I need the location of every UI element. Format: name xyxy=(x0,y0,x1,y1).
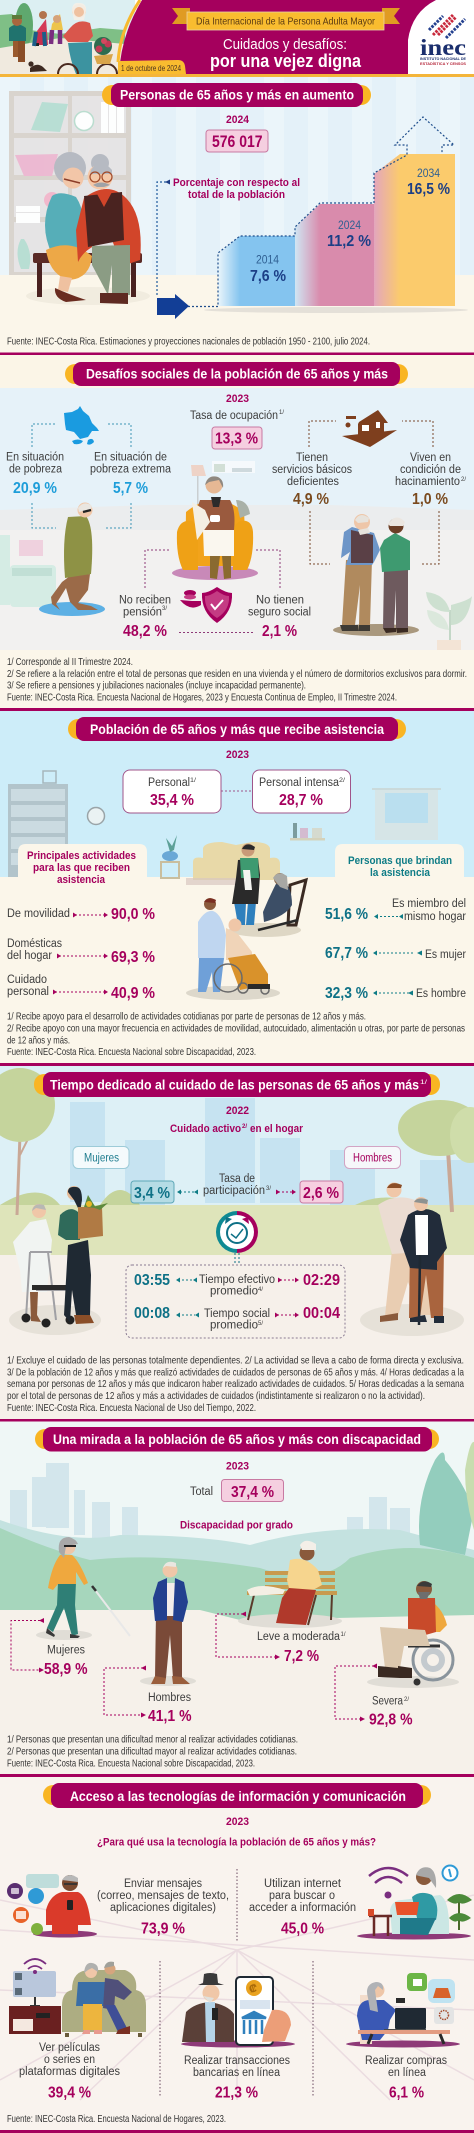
social security label: seguro social xyxy=(248,606,311,618)
crimson title band xyxy=(119,0,436,74)
year: 2023 xyxy=(226,393,249,405)
enviar mensajes: 73,9 % xyxy=(141,1920,185,1938)
tiempo social: 5/ xyxy=(258,1321,263,1327)
label: mujeres xyxy=(73,1146,129,1168)
panel: discapacidad xyxy=(0,1422,474,1774)
illustration: walking man xyxy=(39,502,105,616)
total callout: 37,4 % xyxy=(231,1484,274,1501)
ribbon xyxy=(172,8,400,30)
total callout: Total xyxy=(190,1486,213,1498)
realizar transacciones: Realizar transacciones xyxy=(184,2055,290,2067)
utilizan internet: 45,0 % xyxy=(281,1920,324,1938)
label mujeres xyxy=(44,1644,88,1678)
illustration: caregivers and older adults xyxy=(186,844,306,1000)
poverty label: 20,9 % xyxy=(13,480,57,497)
dividers xyxy=(160,1869,313,2096)
main title: Cuidados y desafíos: xyxy=(223,36,347,53)
tiempo efectivo: 02:29 xyxy=(303,1272,340,1289)
realizar transacciones xyxy=(184,2055,290,2102)
row: cuidado personal: personal xyxy=(7,986,49,998)
background hills xyxy=(0,1520,474,1610)
decorative title pill: Personas de 65 años y más en aumento xyxy=(120,88,354,102)
background city xyxy=(70,1098,474,1205)
row: cuidado personal: Cuidado xyxy=(7,974,47,986)
panel: main activities: asistencia xyxy=(57,874,106,886)
panel: main activities: para las que reciben xyxy=(33,862,130,874)
participation rate: Tasa de xyxy=(219,1173,255,1185)
illustration: man in wheelchair xyxy=(367,1581,459,1688)
pension label: 3/ xyxy=(162,606,167,612)
header illustration: park with older people xyxy=(0,0,135,84)
overcrowding label: 1,0 % xyxy=(412,491,448,508)
title pill: Desafíos sociales de la población de 65 años y más xyxy=(86,366,388,382)
label severa: Severa xyxy=(372,1696,404,1708)
row: movilidad: 90,0 % xyxy=(111,906,155,923)
footnotes: Fuente: INEC-Costa Rica. Encuesta Nacional de Uso del Tiempo, 2022. xyxy=(7,1402,256,1414)
background sofa and lamp xyxy=(0,535,56,607)
basic services label: 4,9 % xyxy=(293,491,329,508)
ribbon: Día Internacional de la Persona Adulta Mayor xyxy=(196,16,375,28)
background wall shelf xyxy=(290,823,325,840)
label leve a moderada: Leve a moderada xyxy=(257,1631,341,1643)
enviar mensajes: Enviar mensajes xyxy=(124,1878,202,1890)
background window xyxy=(372,788,441,840)
illustration: banking: ₡ xyxy=(249,1983,257,1995)
background plant xyxy=(426,592,472,650)
icon: house xyxy=(342,410,397,447)
title pill: Una mirada a la población de 65 años y más con discapacidad xyxy=(53,1432,421,1447)
yellow arc xyxy=(118,0,140,62)
INEC logo: INSTITUTO NACIONAL DE xyxy=(420,57,467,61)
background trees xyxy=(419,1442,474,1555)
row: domésticas xyxy=(7,938,155,966)
subtitle: Discapacidad por grado xyxy=(180,1520,293,1532)
center lamp and shelf decoration xyxy=(191,461,255,504)
illustration: couple watching streaming xyxy=(9,1959,146,2037)
label: mujeres: Mujeres xyxy=(84,1152,119,1164)
subtitle xyxy=(170,1123,304,1135)
bar 2034: 2034 xyxy=(417,168,441,180)
poverty dotted arrows xyxy=(32,424,131,528)
footnotes: 1/ Corresponde al II Trimestre 2024. xyxy=(7,656,133,668)
background radial lines xyxy=(0,1895,474,2100)
utilizan internet: acceder a información xyxy=(249,1902,356,1914)
realizar compras: 6,1 % xyxy=(389,2084,424,2102)
panel: población que recibe asistencia xyxy=(0,711,474,1063)
footnotes: Fuente: INEC-Costa Rica. Encuesta Nacional sobre Discapacidad, 2023. xyxy=(7,1758,255,1770)
participation rate: 3/ xyxy=(266,1186,271,1192)
overcrowding label: hacinamiento xyxy=(395,476,460,488)
row: domésticas: del hogar xyxy=(7,950,52,962)
panel: main activities: Principales actividades xyxy=(27,850,136,862)
row: mujer xyxy=(325,945,466,962)
row: hombre: 32,3 % xyxy=(325,985,368,1002)
source: Fuente: INEC-Costa Rica. Encuesta Nacional de Hogares, 2023. xyxy=(7,2113,226,2125)
illustration: man standing xyxy=(140,1562,196,1686)
chart label: total de la población xyxy=(188,189,285,201)
row: mujer: 67,7 % xyxy=(325,945,368,962)
row: hombre xyxy=(325,985,466,1002)
title pill xyxy=(34,1072,440,1097)
row: miembro del hogar: mismo hogar xyxy=(404,911,466,923)
basic services label xyxy=(272,452,352,508)
bar 2034: 16,5 % xyxy=(407,181,450,198)
row: miembro del hogar xyxy=(325,898,466,923)
title pill xyxy=(43,1783,431,1808)
bookshelf illustration xyxy=(9,91,131,275)
utilizan internet: Utilizan internet xyxy=(264,1878,342,1890)
social security label: 2,1 % xyxy=(262,623,297,640)
label leve a moderada: 7,2 % xyxy=(284,1648,319,1665)
social security label xyxy=(248,594,311,640)
footnotes: 3/ Se refiere a pensiones y jubilaciones nacionales (incluye incapacidad permanente). xyxy=(7,680,306,692)
dotted arrows xyxy=(11,1614,374,1719)
extreme poverty label: pobreza extrema xyxy=(90,464,172,476)
callout: personal intensa: 28,7 % xyxy=(279,792,323,809)
illustration: online shopping xyxy=(346,1973,460,2048)
question: ¿Para qué usa la tecnología la población de 65 años y más? xyxy=(97,1836,376,1848)
basic services label: Tienen xyxy=(296,452,328,464)
row: movilidad xyxy=(7,906,155,923)
footnotes xyxy=(7,656,467,704)
chart label xyxy=(173,177,300,201)
enviar mensajes: (correo, mensajes de texto, xyxy=(97,1890,229,1902)
ver películas: Ver películas xyxy=(39,2042,100,2054)
ver películas: plataformas digitales xyxy=(19,2066,120,2078)
row: hombre: Es hombre xyxy=(416,988,466,1000)
occupation rate: 13,3 % xyxy=(215,430,258,448)
icon: poverty map xyxy=(64,406,99,445)
illustration: banking xyxy=(181,1973,295,2048)
participation rate: 3,4 % xyxy=(134,1185,170,1202)
label mujeres: Mujeres xyxy=(47,1644,85,1656)
row: domésticas: Domésticas xyxy=(7,938,62,950)
panel: caregivers: la asistencia xyxy=(370,867,431,879)
main title xyxy=(210,36,362,71)
decorative title pill xyxy=(102,83,371,107)
panel: caregivers xyxy=(335,844,464,880)
date tab xyxy=(118,60,186,74)
participation rate xyxy=(131,1173,343,1203)
row: miembro del hogar: 51,6 % xyxy=(325,906,368,923)
year: 2023 xyxy=(226,749,249,761)
footnotes: 1/ Personas que presentan una dificultad menor al realizar actividades cotidianas. xyxy=(7,1734,298,1746)
subtitle: en el hogar xyxy=(250,1123,304,1135)
row: mujer: Es mujer xyxy=(425,949,466,961)
title pill xyxy=(68,717,406,741)
bar 2014: 2014 xyxy=(256,254,280,266)
INEC logo: ESTADÍSTICA Y CENSOS xyxy=(420,61,467,66)
bar 2024: 11,2 % xyxy=(327,233,371,250)
year: 2023 xyxy=(226,1460,249,1472)
footnotes xyxy=(7,1010,465,1058)
title pill: Tiempo dedicado al cuidado de las personas de 65 años y más xyxy=(50,1078,419,1092)
year: 2023 xyxy=(226,1816,249,1828)
pension label: No reciben xyxy=(119,594,171,606)
label severa xyxy=(369,1696,412,1728)
illustration: woman on bench xyxy=(238,1541,342,1628)
ver películas: 39,4 % xyxy=(48,2084,91,2102)
callout: personal: 35,4 % xyxy=(150,792,194,809)
label hombres: Hombres xyxy=(148,1692,191,1704)
INEC logo: inec xyxy=(420,35,466,60)
footnotes: 1/ Recibe apoyo para el desarrollo de actividades cotidianas por parte de personas de 12 años y más. xyxy=(7,1010,366,1022)
tiempo efectivo: 03:55 xyxy=(134,1272,170,1289)
title pill: Población de 65 años y más que recibe asistencia xyxy=(90,722,384,737)
participation rate: participación xyxy=(203,1185,265,1197)
stepped bar chart xyxy=(157,117,468,319)
basic services label: servicios básicos xyxy=(272,464,352,476)
time box xyxy=(126,1265,345,1338)
poverty label: de pobreza xyxy=(9,464,63,476)
panel: desafíos sociales xyxy=(0,355,474,708)
realizar transacciones: 21,3 % xyxy=(215,2084,258,2102)
illustration: woman in armchair xyxy=(172,476,258,580)
background sofa xyxy=(193,842,280,880)
illustration: man sending messages xyxy=(7,1874,97,1938)
title pill: 1/ xyxy=(420,1080,427,1086)
illustration: woman with cane xyxy=(36,1537,130,1640)
realizar compras xyxy=(365,2055,447,2102)
central dotted arrows xyxy=(145,550,280,632)
year: 2024 xyxy=(226,114,250,126)
label severa: 92,8 % xyxy=(369,1712,412,1728)
icon: shield and coins xyxy=(180,587,232,623)
social security label: No tienen xyxy=(256,594,304,606)
INEC logo xyxy=(420,15,467,66)
row: cuidado personal xyxy=(7,974,155,1002)
bar 2024 xyxy=(327,220,371,250)
realizar compras: en línea xyxy=(388,2067,427,2079)
date tab: 1 de octubre de 2024 xyxy=(121,64,182,73)
tiempo social: 00:08 xyxy=(134,1305,170,1322)
title pill xyxy=(65,362,408,386)
callout: personal: Personal xyxy=(148,777,190,789)
realizar compras: Realizar compras xyxy=(365,2055,447,2067)
utilizan internet: para buscar o xyxy=(269,1890,335,1902)
chart label: Porcentaje con respecto al xyxy=(173,177,300,189)
overcrowding label xyxy=(395,452,466,508)
bar 2014 xyxy=(250,254,286,285)
footnotes: 2/ Personas que presentan una dificultad mayor al realizar actividades cotidianas. xyxy=(7,1746,297,1758)
tiempo social: 00:04 xyxy=(303,1305,340,1322)
panel: main activities xyxy=(18,844,147,886)
label leve a moderada xyxy=(257,1631,346,1665)
main title: por una vejez digna xyxy=(210,51,362,71)
callout: personal intensa xyxy=(252,770,350,813)
year: 2022 xyxy=(226,1105,249,1117)
extreme poverty label: En situación de xyxy=(94,452,167,464)
callout: personal xyxy=(123,770,221,813)
basic services label: deficientes xyxy=(287,476,339,488)
occupation rate xyxy=(190,410,284,449)
enviar mensajes: aplicaciones digitales) xyxy=(110,1902,216,1914)
tiempo social xyxy=(134,1305,340,1332)
header banner xyxy=(0,0,474,84)
occupation rate: Tasa de ocupación xyxy=(190,410,278,422)
tiempo social: promedio xyxy=(210,1320,258,1332)
tiempo efectivo xyxy=(134,1272,340,1298)
tiempo social: Tiempo social xyxy=(204,1308,270,1320)
total callout xyxy=(190,1480,284,1502)
footnotes: de 12 años y más. xyxy=(7,1034,70,1046)
label mujeres: 58,9 % xyxy=(44,1661,88,1678)
panel: acceso a las tecnologías xyxy=(0,1777,474,2130)
footnotes: Fuente: INEC-Costa Rica. Encuesta Nacional sobre Discapacidad, 2023. xyxy=(7,1046,256,1058)
label leve a moderada: 1/ xyxy=(340,1632,346,1638)
callout: population: 576 017 xyxy=(212,132,262,151)
illustration: women caregiver with walker xyxy=(9,1186,108,1335)
background city xyxy=(10,1463,410,1557)
overcrowding label: condición de xyxy=(400,464,461,476)
label: hombres xyxy=(344,1146,400,1168)
panel: caregivers: Personas que brindan xyxy=(348,855,452,867)
pension label: 48,2 % xyxy=(123,623,167,640)
footnotes xyxy=(7,1734,298,1770)
tiempo efectivo: Tiempo efectivo xyxy=(199,1274,275,1286)
pension label xyxy=(119,594,171,640)
icon: alarm clock xyxy=(216,1211,258,1265)
tiempo efectivo: promedio xyxy=(210,1286,258,1298)
subtitle: 2/ xyxy=(242,1124,247,1130)
utilizan internet xyxy=(249,1878,356,1938)
background trees xyxy=(0,1068,474,1215)
label: hombres: Hombres xyxy=(353,1152,392,1164)
illustration: older couple xyxy=(333,514,419,636)
panel: tiempo dedicado al cuidado xyxy=(0,1066,474,1419)
ver películas xyxy=(19,2042,120,2102)
housing dotted arrows xyxy=(309,421,439,564)
title pill: Acceso a las tecnologías de información y comunicación xyxy=(70,1789,406,1804)
overcrowding label: 2/ xyxy=(461,477,466,483)
realizar transacciones: bancarias en línea xyxy=(193,2067,281,2079)
subtitle: Cuidado activo xyxy=(170,1123,241,1135)
extreme poverty label: 5,7 % xyxy=(113,480,148,497)
label hombres xyxy=(148,1692,192,1725)
callout: personal: 1/ xyxy=(190,778,196,784)
label severa: 2/ xyxy=(404,1697,409,1703)
row: domésticas: 69,3 % xyxy=(111,949,155,966)
bar 2034 xyxy=(407,168,450,198)
footnotes xyxy=(7,1354,464,1414)
illustration: men caregiver with older man xyxy=(360,1182,464,1336)
poverty label xyxy=(6,452,64,497)
callout: personal intensa: Personal intensa xyxy=(259,777,340,789)
illustration: woman with laptop xyxy=(357,1866,472,1940)
poverty label: En situación xyxy=(6,452,64,464)
background vase on table xyxy=(161,835,179,878)
enviar mensajes xyxy=(97,1878,229,1938)
dotted arrow to label xyxy=(157,180,170,295)
callout: personal intensa: 2/ xyxy=(339,778,345,784)
row: movilidad: De movilidad xyxy=(7,908,70,920)
row: cuidado personal: 40,9 % xyxy=(111,985,155,1002)
panel: personas de 65 años y más en aumento xyxy=(0,77,474,353)
illustration: older couple on a bench xyxy=(26,152,150,305)
background gauge xyxy=(88,808,104,824)
ver películas: o series en xyxy=(44,2054,95,2066)
bar 2024: 2024 xyxy=(338,220,362,232)
occupation rate: 1/ xyxy=(279,410,284,416)
row: miembro del hogar: Es miembro del xyxy=(392,898,466,910)
tiempo efectivo: 4/ xyxy=(258,1287,263,1293)
title pill xyxy=(35,1427,439,1452)
background bookshelf xyxy=(8,771,68,877)
participation rate: 2,6 % xyxy=(303,1185,339,1202)
bar 2014: 7,6 % xyxy=(250,268,286,285)
extreme poverty label xyxy=(90,452,172,497)
overcrowding label: Viven en xyxy=(410,452,451,464)
pension label: pensión xyxy=(123,606,162,618)
label hombres: 41,1 % xyxy=(148,1708,192,1725)
